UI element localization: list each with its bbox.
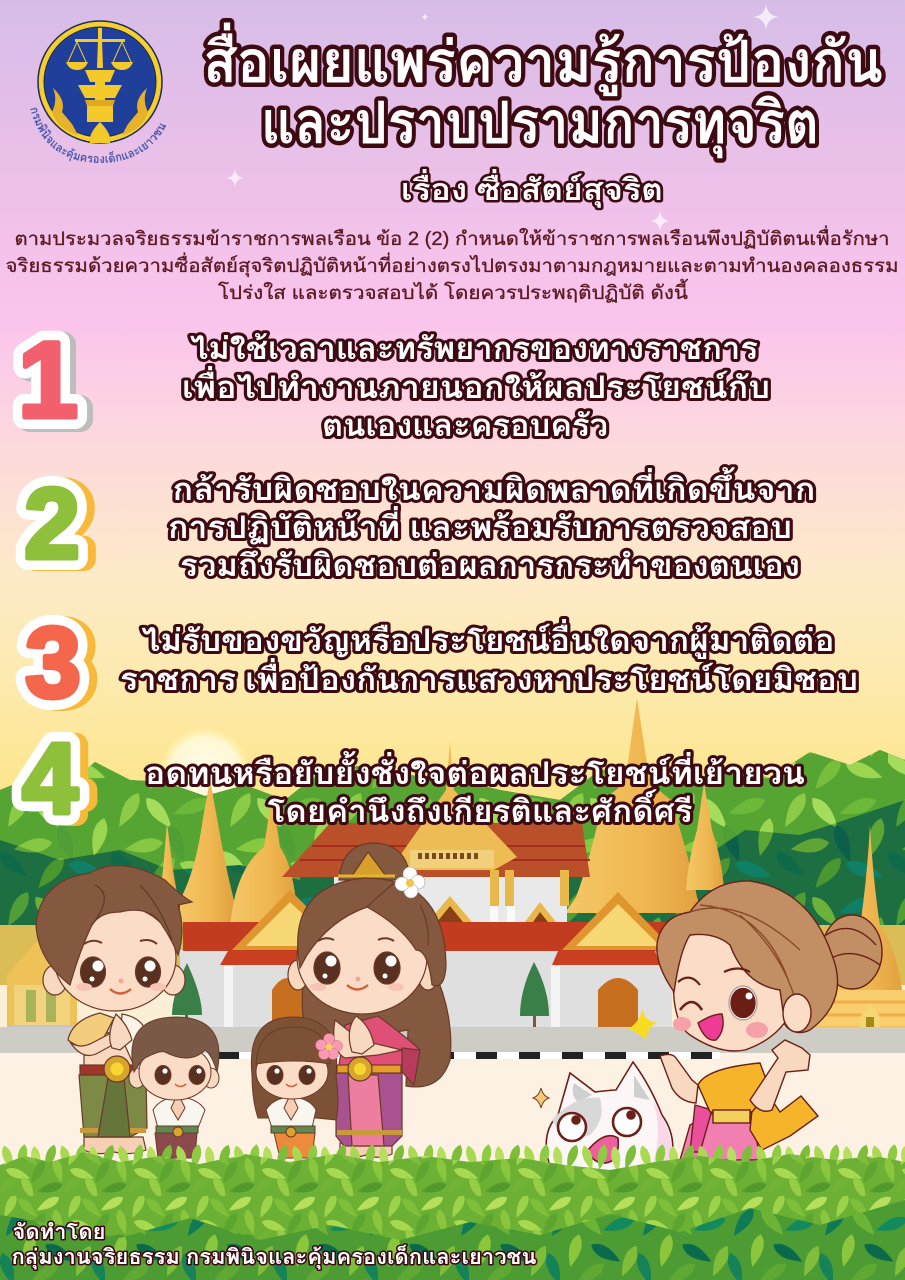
lotus flame	[90, 122, 110, 143]
yellow sleeve	[750, 1090, 818, 1150]
hair	[657, 881, 838, 1033]
ears	[43, 965, 67, 995]
title line 1: สื่อเผยแพร่ความรู้การป้องกัน	[203, 22, 883, 97]
central hall	[282, 742, 590, 924]
intro paragraph	[6, 225, 899, 304]
number 4: 4	[22, 723, 78, 835]
white columns	[224, 966, 560, 1028]
trees	[172, 962, 549, 1036]
character: cat	[546, 1062, 673, 1172]
logo: department seal	[30, 20, 166, 163]
item 4 text	[145, 751, 805, 829]
purple skirt	[336, 1073, 402, 1146]
item 2 text: รวมถึงรับผิดชอบต่อผลการกระทำของตนเอง	[180, 548, 800, 583]
intro paragraph: ตามประมวลจริยธรรมข้าราชการพลเรือน ข้อ 2 (2) กำหนดให้ข้าราชการพลเรือนพึงปฏิบัติตนเพื่อรักษา	[14, 225, 890, 250]
roof tiers	[282, 823, 590, 877]
item 1 text: ตนเองและครอบครัว	[322, 408, 608, 443]
character: man	[36, 865, 192, 1154]
temple complex	[0, 698, 905, 1047]
ear	[783, 994, 811, 1032]
intro paragraph: จริยธรรมด้วยความซื่อสัตย์สุจริตปฏิบัติหน้าที่อย่างตรงไปตรงมาตามกฎหมายและตามทำนองคลองธรรม	[6, 252, 899, 278]
tassels and columns	[490, 870, 569, 906]
character: girl	[251, 1017, 342, 1158]
item 2 text: การปฏิบัติหน้าที่ และพร้อมรับการตรวจสอบ	[168, 506, 792, 545]
sparkles	[226, 4, 779, 305]
wink	[680, 1002, 702, 1010]
arms	[660, 1054, 698, 1103]
right gold stupa	[815, 825, 905, 1037]
number 1: 1	[23, 321, 83, 442]
item 2 text	[168, 467, 816, 583]
blush	[673, 1017, 691, 1031]
number 3: 3	[25, 607, 81, 719]
ears	[288, 960, 308, 990]
number 4: 4	[22, 723, 78, 835]
icon: pink flower	[316, 1034, 342, 1060]
icon: white flower	[395, 867, 425, 898]
number 3: 3	[33, 608, 89, 720]
pink skirt	[680, 1112, 760, 1160]
seal text arc: กรมพินิจและคุ้มครองเด็กและเยาวชน	[30, 108, 166, 163]
item 3 text: ราชการ เพื่อป้องกันการแสวงหาประโยชน์โดยมิชอบ	[120, 658, 858, 697]
number 2: 2	[24, 468, 80, 580]
eyes	[80, 957, 106, 987]
item 1 text	[182, 331, 770, 443]
courtyard pavement	[0, 1027, 905, 1053]
central gable	[399, 742, 517, 870]
doors	[272, 978, 638, 1028]
scales of justice	[66, 28, 133, 122]
golden stupas	[160, 698, 724, 930]
checkered curb	[215, 1052, 720, 1059]
item 1 text: ไม่ใช้เวลาและทรัพยากรของทางราชการ	[190, 331, 758, 366]
red roofs and gables	[183, 890, 674, 965]
hall walls	[180, 950, 672, 1028]
cream ground	[0, 1053, 905, 1193]
face	[297, 900, 427, 1014]
green skirt	[79, 1075, 147, 1137]
character: woman in Thai dress	[288, 843, 451, 1157]
hair	[36, 865, 192, 985]
background foliage	[0, 750, 905, 935]
item 2 text: กล้ารับผิดชอบในความผิดพลาดที่เกิดขึ้นจาก	[172, 467, 816, 507]
distant gold wall behind temple	[0, 925, 905, 985]
number 1: 1	[18, 319, 78, 440]
face	[54, 905, 176, 1011]
number 2: 2	[32, 469, 88, 581]
item 1 text: เพื่อไปทำงานภายนอกให้ผลประโยชน์กับ	[182, 366, 770, 405]
footer line 2: กลุ่มงานจริยธรรม กรมพินิจและคุ้มครองเด็กและเยาวชน	[12, 1244, 536, 1270]
shoulder cloth	[118, 1014, 148, 1072]
long hair	[302, 980, 451, 1087]
character: boy	[129, 1017, 219, 1158]
left gold pavilion	[7, 937, 77, 1047]
mouth	[698, 1014, 723, 1040]
item 4 text: โดยคำนึงถึงเกียรติและศักดิ์ศรี	[268, 789, 692, 829]
front hedge	[0, 1138, 905, 1280]
icon: yellow sparkle	[628, 1009, 657, 1040]
item 3 text	[120, 619, 858, 697]
naga ornaments	[52, 88, 148, 135]
face	[673, 934, 790, 1051]
footer line 1: จัดทำโดย	[12, 1221, 106, 1244]
yellow blouse	[698, 1063, 770, 1112]
number 3: 3	[25, 607, 81, 719]
small gables	[428, 896, 472, 922]
belt and buckle	[337, 1065, 401, 1073]
eye	[729, 986, 757, 1020]
icon: cat sparkle	[533, 1088, 549, 1108]
feet	[340, 1143, 392, 1157]
belt and buckle	[80, 1065, 136, 1075]
subtitle: เรื่อง ซื่อสัตย์สุจริต	[401, 169, 663, 208]
item 3 text: ไม่รับของขวัญหรือประโยชน์อื่นใดจากผู้มาติดต่อ	[142, 619, 834, 659]
title line 2: และปราบปรามการทุจริต	[261, 91, 819, 159]
number 2: 2	[24, 468, 80, 580]
bun	[822, 915, 882, 989]
intro paragraph: โปร่งใส และตรวจสอบได้ โดยควรประพฤติปฏิบัติ ดังนี้	[218, 279, 688, 304]
character: waving woman	[657, 881, 882, 1160]
item 4 text: อดทนหรือยับยั้งชั่งใจต่อผลประโยชน์ที่เย้ายวน	[145, 751, 805, 791]
front hair	[298, 878, 446, 986]
eyes	[314, 952, 340, 984]
top knot and crown	[339, 843, 410, 880]
number 1: 1	[18, 319, 78, 440]
title	[203, 22, 883, 159]
pink blouse	[338, 1016, 420, 1072]
sun	[161, 728, 249, 816]
seal disc	[38, 21, 162, 143]
feet	[84, 1137, 146, 1154]
footer credit	[12, 1221, 536, 1270]
number 4: 4	[30, 724, 86, 836]
